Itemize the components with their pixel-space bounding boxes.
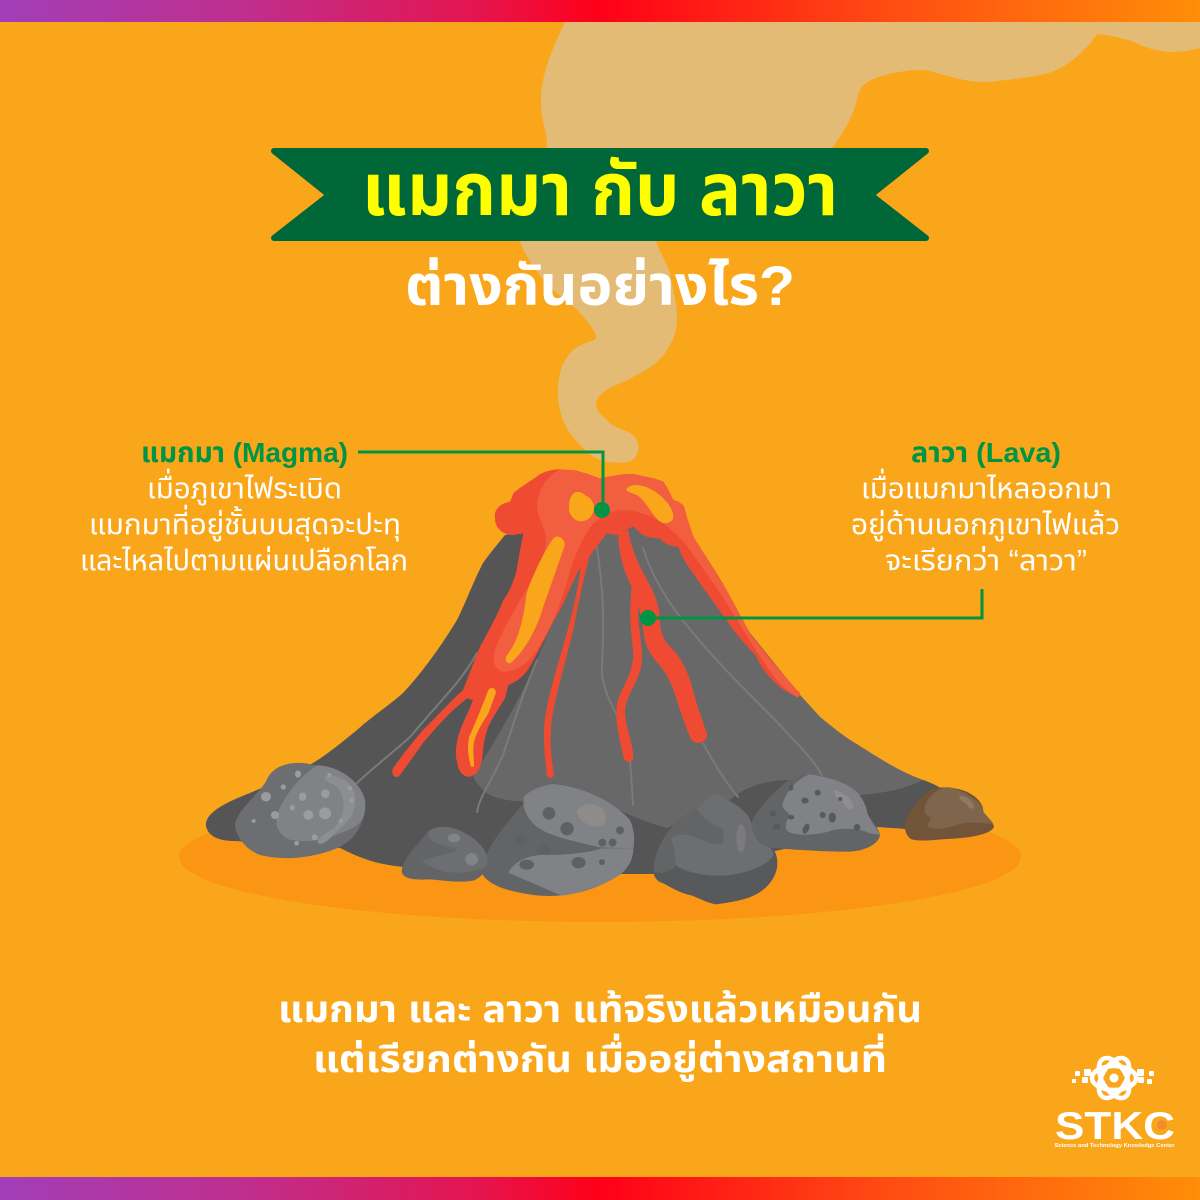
lava leader line xyxy=(652,589,982,618)
ground shadow ellipse xyxy=(179,792,1021,922)
lava flows xyxy=(392,469,800,778)
lava hot channel long xyxy=(506,537,565,663)
magma leader line xyxy=(358,452,603,505)
lava marker dot xyxy=(640,610,656,626)
lava vent opening right xyxy=(626,485,673,523)
logo wordmark: STKC xyxy=(1055,1105,1175,1148)
magma description: และไหลไปตามแผ่นเปลือกโลก xyxy=(80,545,408,577)
banner ribbon xyxy=(274,151,926,238)
magma callout xyxy=(80,437,610,577)
banner title text: แมกมา กับ ลาวา xyxy=(362,148,838,231)
title banner xyxy=(274,148,926,238)
lava highlight xyxy=(494,469,800,697)
lava description: เมื่อแมกมาไหลออกมา xyxy=(861,468,1112,505)
volcano illustration xyxy=(206,469,994,904)
logo atom icon xyxy=(1072,1053,1154,1103)
STKC logo xyxy=(1054,1053,1175,1149)
logo tagline: Science and Technology Knowledge Center xyxy=(1054,1143,1175,1149)
conclusion text: แมกมา และ ลาวา แท้จริงแล้วเหมือนกัน xyxy=(278,989,922,1030)
rock right speckled xyxy=(752,774,880,852)
smoke plume xyxy=(520,22,1200,463)
magma description: แมกมาที่อยู่ชั้นบนสุดจะปะทุ xyxy=(89,504,401,542)
gray streaks on the slope xyxy=(357,547,822,812)
bottom gradient bar xyxy=(0,1177,1200,1200)
magma description xyxy=(80,468,408,577)
lava center stream xyxy=(616,530,707,762)
top gradient bar xyxy=(0,0,1200,22)
lava description xyxy=(851,468,1120,577)
magma marker dot xyxy=(594,502,610,518)
mountain light face xyxy=(473,515,923,828)
rock brown xyxy=(905,787,994,841)
rock center large xyxy=(482,783,634,896)
rock small center-left xyxy=(402,827,487,882)
lava description: อยู่ด้านนอกภูเขาไฟแล้ว xyxy=(851,509,1120,542)
lava heading: ลาวา (Lava) xyxy=(911,437,1061,468)
mountain dark base xyxy=(206,510,945,874)
lava main body xyxy=(392,469,800,778)
magma description: เมื่อภูเขาไฟระเบิด xyxy=(147,468,342,506)
lava hot channel short xyxy=(468,688,496,767)
rock left speckled xyxy=(235,763,365,858)
subtitle: ต่างกันอย่างไร? xyxy=(405,254,795,317)
conclusion text xyxy=(278,989,922,1082)
magma heading: แมกมา (Magma) xyxy=(141,437,348,468)
lava description: จะเรียกว่า “ลาวา” xyxy=(885,545,1087,577)
conclusion text: แต่เรียกต่างกัน เมื่ออยู่ต่างสถานที่ xyxy=(313,1033,887,1082)
rock center-right dark xyxy=(653,793,777,904)
lava callout xyxy=(640,437,1120,626)
lava vent opening small xyxy=(569,492,594,521)
logo accent dot xyxy=(1157,1120,1167,1130)
